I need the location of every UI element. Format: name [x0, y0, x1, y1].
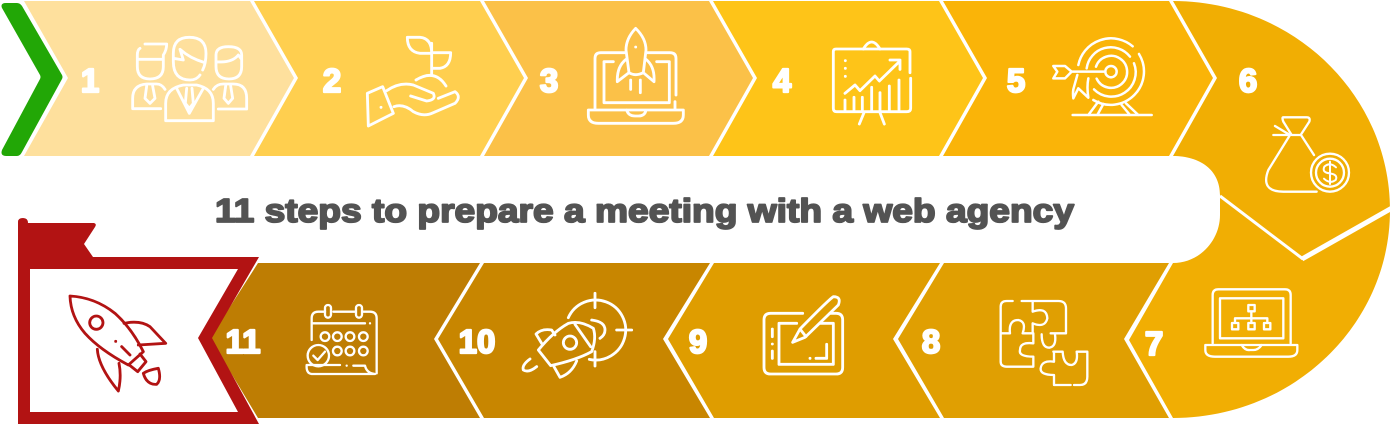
step 5: [943, 1, 1213, 156]
icon: red rocket: [70, 296, 166, 391]
number 4: 4: [773, 62, 792, 99]
segment 11: [210, 263, 480, 418]
segment 4: [713, 1, 983, 156]
steps 6 and 7: curved turn: [1129, 1, 1390, 418]
divider right part: [1302, 208, 1390, 259]
finish flag: [18, 218, 259, 424]
number 7: 7: [1145, 325, 1163, 362]
step 1: [24, 1, 294, 156]
segment 10: [438, 263, 710, 418]
step 9: [668, 263, 940, 418]
segment 2: [254, 1, 524, 156]
icon: puzzle pieces: [1001, 301, 1087, 385]
curved segment 6 and 7: [1129, 1, 1390, 418]
icon: calendar with check: [307, 305, 377, 374]
step 10: [438, 263, 710, 418]
segment 3: [484, 1, 753, 156]
start marker: green chevron: [2, 3, 62, 156]
number 6: 6: [1239, 62, 1257, 99]
number 1: 1: [81, 62, 99, 99]
number 10: 10: [459, 323, 495, 360]
step 8: [898, 263, 1169, 418]
step 3: [484, 1, 753, 156]
step 11: [210, 263, 480, 418]
icon: money bag with coin: [1266, 117, 1349, 192]
number 8: 8: [922, 323, 940, 360]
step 4: [713, 1, 983, 156]
icon: hand holding sprout: [367, 37, 458, 126]
title: 11 steps to prepare a meeting with a web agency: [215, 192, 1075, 229]
icon: laptop with sitemap: [1205, 289, 1297, 357]
number 2: 2: [323, 62, 341, 99]
icon: drawing tablet with pen: [764, 297, 843, 374]
flag shape: [18, 218, 259, 424]
step 2: [254, 1, 524, 156]
icon: arrow hitting target: [1053, 38, 1152, 115]
icon: rocket and crosshair: [523, 293, 632, 377]
segment 8: [898, 263, 1169, 418]
number 5: 5: [1007, 62, 1025, 99]
segment 5: [943, 1, 1213, 156]
number 11: 11: [226, 323, 260, 360]
divider between 6 and 7: [1220, 196, 1303, 259]
icon: team of three people: [133, 37, 247, 121]
icon: growth chart on presentation board: [833, 42, 911, 124]
number 3: 3: [540, 62, 558, 99]
segment 1: [24, 1, 294, 156]
icon: rocket launching from laptop: [588, 28, 683, 123]
number 9: 9: [689, 323, 707, 360]
segment 9: [668, 263, 940, 418]
flag white panel: [30, 269, 238, 412]
